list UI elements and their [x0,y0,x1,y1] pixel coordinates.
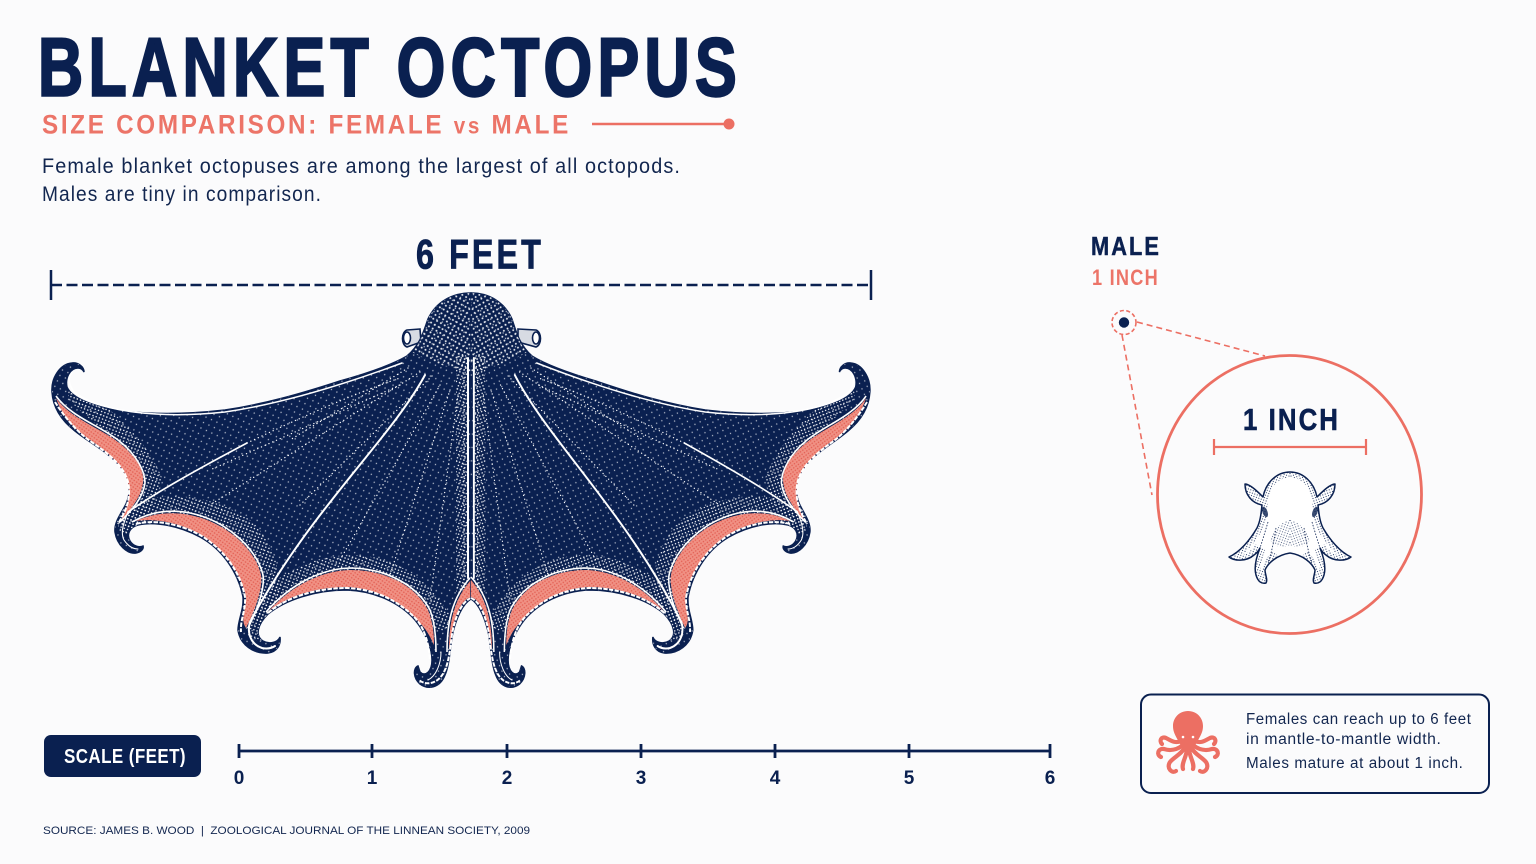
scale axis: 3 [636,768,646,789]
scale label: SCALE (FEET) [64,746,186,768]
dimension line [51,270,871,300]
callout text [1246,711,1472,772]
male label [1091,231,1161,290]
right half [462,280,881,700]
zoom connector lines [1122,322,1265,495]
scale axis: 0 [234,768,244,789]
scale label [44,735,201,777]
intro text: Males are tiny in comparison. [42,182,322,206]
male label: 1 INCH [1092,265,1159,290]
scale axis [234,744,1055,789]
title: BLANKET OCTOPUS [38,20,742,114]
scale axis: 2 [502,768,512,789]
scale axis: 4 [770,768,781,789]
scale axis: 6 [1045,768,1055,789]
scale axis: 5 [904,768,915,789]
left half [40,280,480,700]
intro text [42,154,681,206]
scale axis: 1 [367,768,378,789]
source: SOURCE: JAMES B. WOOD | ZOOLOGICAL JOURNAL OF THE LINNEAN SOCIETY, 2009 [43,825,530,837]
illustration: female blanket octopus [40,280,881,700]
magnified width label [1214,402,1366,455]
subtitle with accent line: SIZE COMPARISON: FEMALE vs MALE [42,110,571,140]
intro text: Female blanket octopuses are among the largest of all octopods. [42,154,681,178]
magnifier circle [1158,356,1422,634]
callout text: Males mature at about 1 inch. [1246,755,1464,772]
callout text: in mantle-to-mantle width. [1246,731,1442,748]
male label: MALE [1091,231,1161,261]
callout text: Females can reach up to 6 feet [1246,711,1472,728]
illustration: male octopus [1229,472,1351,583]
magnified width label: 1 INCH [1243,402,1340,437]
female width label: 6 feet: 6 FEET [416,230,544,278]
eyes [402,329,540,347]
icon: octopus [1158,711,1218,772]
callout box [1141,694,1489,793]
male actual-size marker [1112,310,1136,334]
